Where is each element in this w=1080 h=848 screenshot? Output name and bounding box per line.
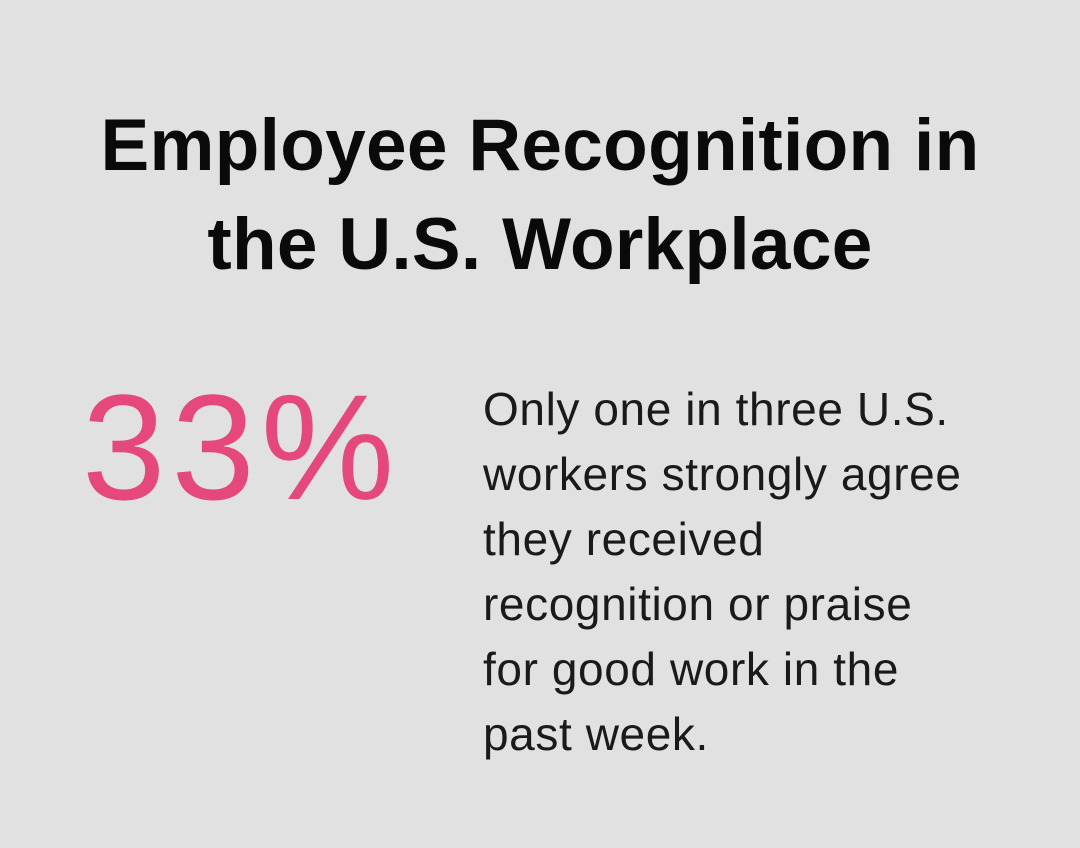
description text: recognition or praise	[483, 578, 912, 630]
title	[101, 105, 979, 285]
description text: for good work in the	[483, 643, 899, 695]
description text: Only one in three U.S.	[483, 383, 949, 435]
title: the U.S. Workplace	[207, 204, 873, 285]
big stat: 33%: 33%	[82, 363, 400, 531]
description text: workers strongly agree	[483, 448, 962, 500]
description text: they received	[483, 513, 764, 565]
description text: past week.	[483, 708, 709, 760]
title: Employee Recognition in	[101, 105, 979, 186]
description text	[483, 383, 962, 760]
